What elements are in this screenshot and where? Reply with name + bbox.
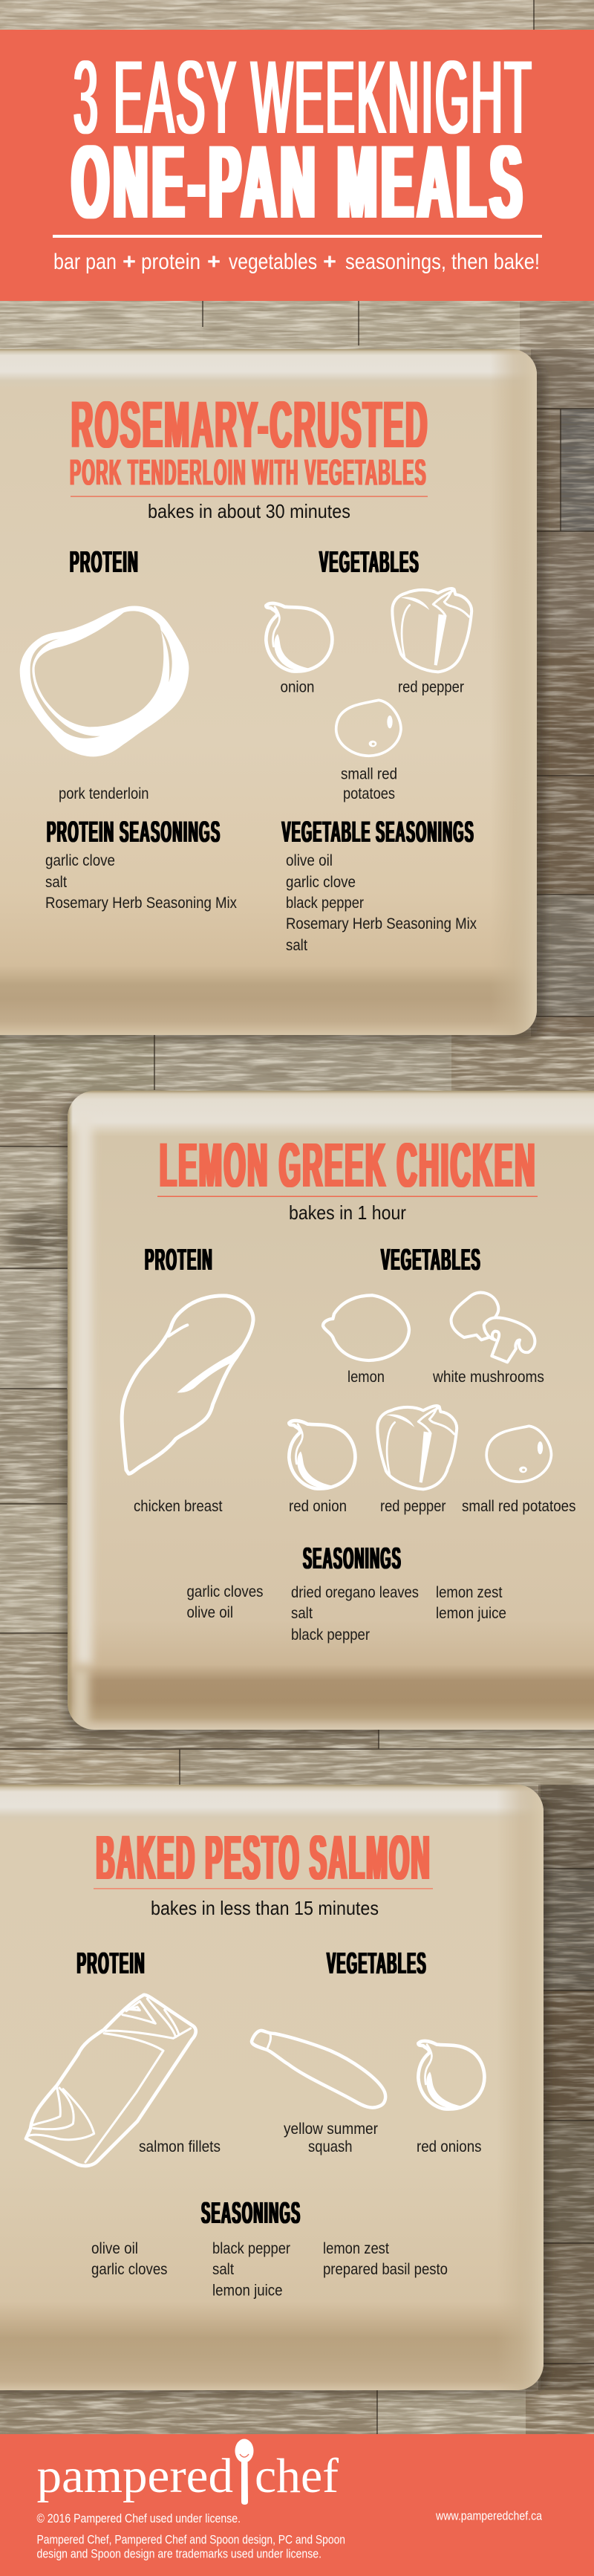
panel: baked pesto salmon pan (0, 1785, 549, 2396)
trademark notice (37, 2532, 345, 2560)
seasonings list column three: lemon zest (436, 1584, 503, 1601)
logo: pampered (37, 2449, 233, 2503)
vegetable seasonings list: garlic clove (286, 874, 356, 891)
seasonings list column two: salt (212, 2261, 234, 2278)
label: red pepper: red pepper (398, 679, 464, 695)
icon: red onions (418, 2041, 484, 2109)
seasonings list column one: olive oil (91, 2240, 138, 2257)
vegetable seasonings list: Rosemary Herb Seasoning Mix (286, 915, 477, 932)
formula subtitle: seasonings, then bake! (345, 250, 540, 274)
icon: pork tenderloin (20, 606, 189, 756)
icon: red pepper (392, 588, 471, 672)
label: salmon fillets: salmon fillets (139, 2138, 221, 2155)
panel: lemon greek chicken pan: PROTEIN (145, 1242, 213, 1276)
seasonings list column three: lemon zest (323, 2240, 389, 2257)
formula subtitle: + (123, 250, 136, 274)
label: red pepper: red pepper (380, 1498, 446, 1515)
seasonings list column three (323, 2240, 448, 2278)
panel: lemon greek chicken pan: SEASONINGS (303, 1541, 402, 1575)
panel: lemon greek chicken pan (62, 1091, 594, 1736)
label: white mushrooms: white mushrooms (432, 1369, 544, 1386)
panel: baked pesto salmon pan: PROTEIN (77, 1946, 146, 1980)
label: small red potatoes: potatoes (343, 785, 395, 802)
seasonings list column three: prepared basil pesto (323, 2261, 448, 2278)
seasonings list column two: lemon juice (212, 2283, 282, 2299)
icon: lemon (323, 1295, 409, 1360)
pan tray (62, 1091, 594, 1736)
panel: rosemary-crusted pork tenderloin pan: PROTEIN SEASONINGS (47, 816, 221, 849)
icon: red pepper (377, 1406, 457, 1489)
panel: rosemary-crusted pork tenderloin pan (0, 349, 546, 1041)
formula subtitle (53, 250, 540, 274)
protein seasonings list: garlic clove (45, 852, 115, 869)
seasonings list column two: black pepper (212, 2240, 290, 2257)
label: yellow summer squash (284, 2121, 378, 2155)
protein seasonings list: Rosemary Herb Seasoning Mix (45, 895, 237, 912)
title rule (94, 1888, 433, 1889)
icon: small red potatoes (486, 1426, 551, 1482)
seasonings list column three (436, 1584, 506, 1622)
protein seasonings list (45, 852, 237, 912)
title rule (71, 496, 428, 497)
header rule (53, 235, 542, 238)
protein seasonings list: salt (45, 874, 67, 891)
icon: yellow summer squash (252, 2031, 385, 2108)
title rule (157, 1196, 538, 1197)
website: www.pamperedchef.ca (435, 2508, 542, 2523)
panel: rosemary-crusted pork tenderloin pan: VEGETABLES (319, 545, 420, 579)
seasonings list column one: garlic cloves (91, 2261, 168, 2278)
bake time: bakes in less than 15 minutes (151, 1897, 379, 1919)
label: onion: onion (281, 679, 315, 695)
label: small red potatoes: small red potatoes (462, 1498, 576, 1515)
footer banner (0, 2434, 594, 2576)
vegetable seasonings list: black pepper (286, 895, 364, 912)
panel: baked pesto salmon pan: SEASONINGS (201, 2196, 301, 2230)
formula subtitle: bar pan (53, 250, 117, 274)
seasonings list column one (91, 2240, 168, 2278)
label: small red potatoes (341, 765, 397, 802)
icon: chicken breast (122, 1296, 253, 1473)
seasonings list column two: salt (291, 1605, 313, 1622)
pan tray (0, 1785, 549, 2396)
copyright: © 2016 Pampered Chef used under license. (37, 2511, 241, 2525)
formula subtitle: + (207, 250, 221, 274)
header banner (0, 30, 594, 301)
seasonings list column two: dried oregano leaves (291, 1584, 419, 1601)
icon: spoon (235, 2439, 254, 2505)
formula subtitle: protein (141, 250, 200, 274)
icon: white mushrooms (451, 1293, 535, 1362)
label: pork tenderloin: pork tenderloin (59, 785, 148, 802)
trademark notice: design and Spoon design are trademarks used under license. (37, 2547, 322, 2560)
panel: rosemary-crusted pork tenderloin pan: PROTEIN (70, 545, 139, 579)
pan tray (0, 349, 546, 1041)
bake time: bakes in about 30 minutes (148, 500, 350, 522)
label: yellow summer squash: squash (308, 2138, 352, 2155)
formula subtitle: vegetables (229, 250, 317, 274)
seasonings list column three: lemon juice (436, 1605, 506, 1622)
seasonings list column one: olive oil (187, 1604, 233, 1621)
icon: small red potatoes (336, 700, 401, 756)
seasonings list column two (291, 1584, 419, 1644)
label: red onion: red onion (289, 1498, 347, 1515)
seasonings list column one (187, 1583, 263, 1621)
seasonings list column two: black pepper (291, 1626, 370, 1644)
seasonings list column one: garlic cloves (187, 1583, 263, 1600)
vegetable seasonings list (286, 852, 477, 954)
logo: chef (255, 2449, 339, 2503)
vegetable seasonings list: olive oil (286, 852, 333, 869)
panel: baked pesto salmon pan: VEGETABLES (327, 1946, 427, 1980)
label: red onions: red onions (417, 2138, 481, 2155)
logo (37, 2439, 339, 2505)
label: chicken breast: chicken breast (134, 1498, 223, 1515)
label: lemon: lemon (347, 1369, 385, 1386)
icon: salmon fillets (26, 1995, 196, 2166)
label: yellow summer squash: yellow summer (284, 2121, 378, 2138)
vegetable seasonings list: salt (286, 937, 307, 954)
trademark notice: Pampered Chef, Pampered Chef and Spoon design, PC and Spoon (37, 2532, 345, 2547)
icon: red onion (289, 1421, 355, 1489)
bake time: bakes in 1 hour (289, 1201, 406, 1224)
icon: onion (266, 603, 332, 672)
seasonings list column two (212, 2240, 290, 2299)
label: small red potatoes: small red (341, 765, 397, 783)
formula subtitle: + (323, 250, 336, 274)
